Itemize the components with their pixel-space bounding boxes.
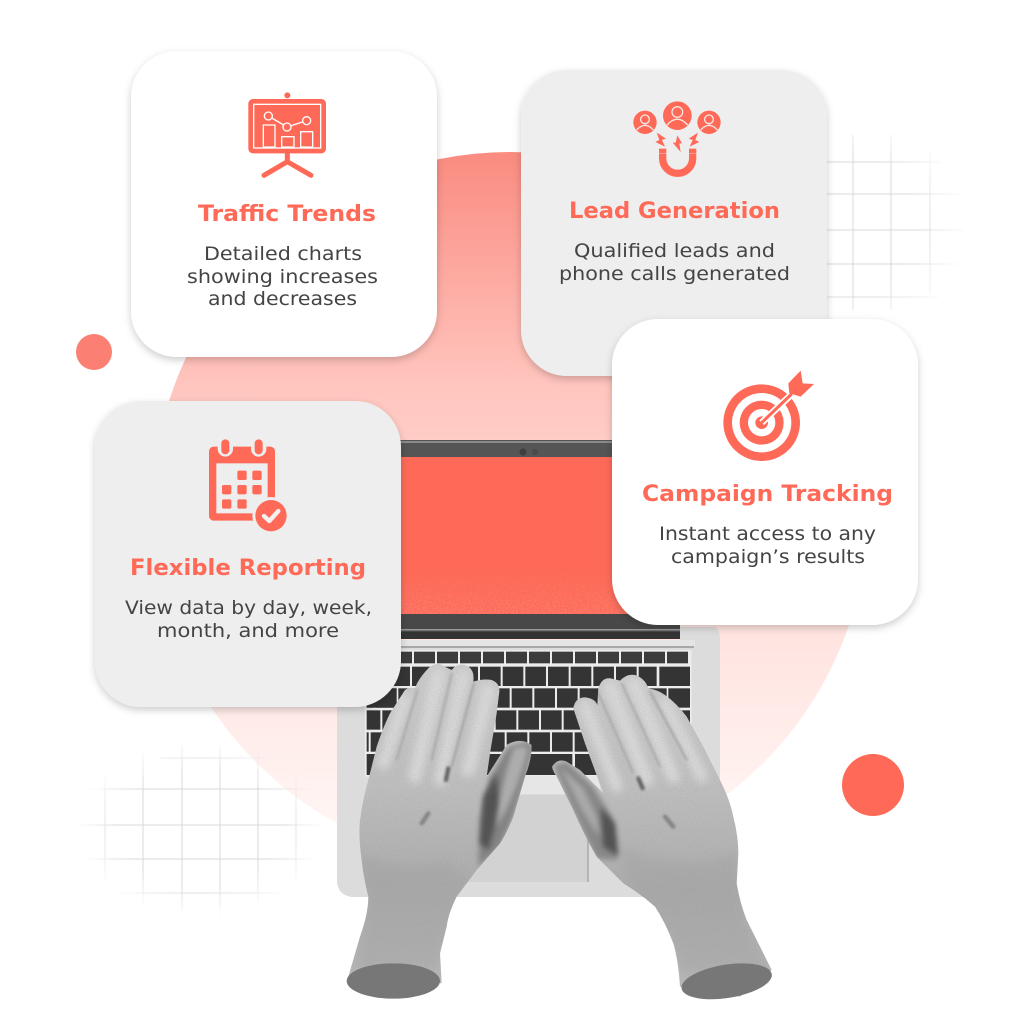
hands typing — [340, 653, 787, 1005]
text: Lead Generation description: Qualified leads and — [574, 240, 775, 262]
laptop — [337, 440, 720, 897]
text: Flexible Reporting description: month, and more — [157, 620, 339, 642]
title: Campaign Tracking: Campaign Tracking — [642, 481, 893, 507]
text: Traffic Trends description — [187, 243, 378, 310]
icon: calendar with check — [209, 437, 290, 534]
card: Flexible Reporting — [95, 401, 401, 707]
text: Flexible Reporting description — [125, 597, 372, 642]
decorative circle right — [842, 754, 904, 816]
card: Traffic Trends — [131, 51, 437, 357]
text: Traffic Trends description: Detailed charts — [204, 243, 362, 265]
text: Flexible Reporting description: View data by day, week, — [125, 597, 372, 619]
title: Traffic Trends: Traffic Trends — [198, 201, 376, 227]
laptop screen — [400, 440, 628, 614]
icon: target with arrow — [723, 371, 814, 461]
card: Lead Generation — [521, 70, 827, 376]
text: Lead Generation description: phone calls generated — [559, 263, 790, 285]
text: Campaign Tracking description: campaign’s results — [671, 546, 865, 568]
text: Lead Generation description — [559, 240, 790, 285]
text: Campaign Tracking description: Instant access to any — [659, 523, 876, 545]
left wrist end — [347, 963, 440, 999]
decorative circle left — [76, 334, 112, 370]
left hand — [346, 664, 532, 999]
text: Traffic Trends description: showing increases — [187, 266, 378, 288]
text: Traffic Trends description: and decreases — [208, 288, 357, 310]
background gradient circle — [152, 152, 868, 868]
trackpad — [428, 795, 588, 882]
icon: magnet attracting people — [633, 101, 721, 173]
title: Flexible Reporting: Flexible Reporting — [130, 555, 366, 581]
card: Campaign Tracking — [612, 319, 918, 625]
icon: presentation chart — [248, 92, 326, 175]
title: Lead Generation: Lead Generation — [569, 198, 780, 224]
text: Campaign Tracking description — [659, 523, 876, 568]
keyboard — [365, 650, 692, 777]
right wrist end — [679, 958, 774, 1005]
laptop base — [337, 627, 720, 897]
right hand — [552, 674, 772, 1000]
